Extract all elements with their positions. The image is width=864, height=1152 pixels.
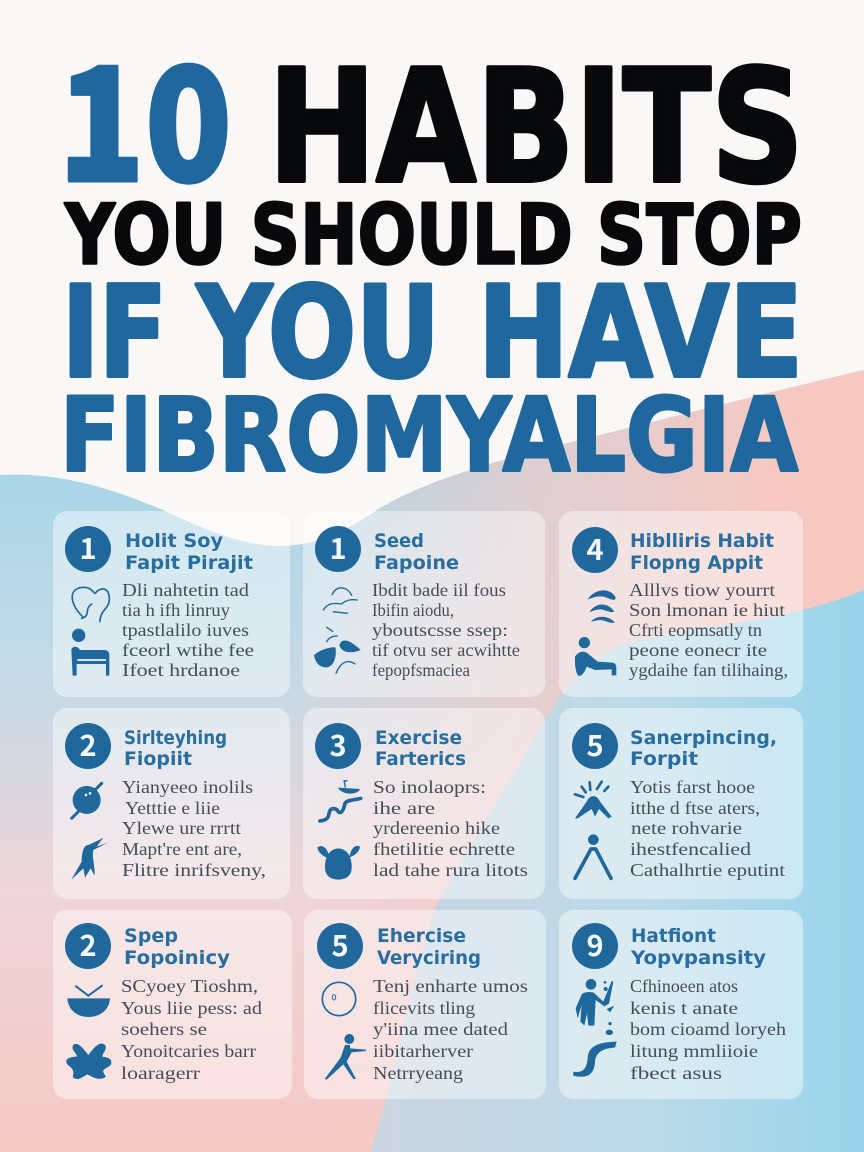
icon: ball and figure — [71, 783, 108, 880]
body text: yrdereenio hike — [373, 818, 500, 838]
body text: tif otvu ser acwihtte — [372, 640, 520, 660]
heading — [377, 925, 481, 969]
panel: card 5 — [303, 708, 545, 899]
icon: person drinking and water — [573, 979, 617, 1077]
number badge: 4 — [586, 527, 604, 569]
heading — [125, 530, 253, 574]
body text: fhetilitie echrette — [373, 839, 515, 859]
body text: lad tahe rura litots — [373, 860, 528, 880]
heading: Farterics — [375, 748, 466, 770]
body text: fceorl wtihe fee — [122, 640, 254, 660]
body text: SCyoey Tioshm, — [121, 976, 258, 996]
number badge — [315, 526, 361, 572]
number badge: 2 — [79, 923, 97, 965]
body text — [122, 777, 266, 880]
title line: if you have: YOU — [195, 259, 440, 406]
number badge: 2 — [79, 723, 97, 765]
number badge: 5 — [331, 923, 349, 965]
icon: burst and figure — [575, 782, 612, 878]
number badge: 1 — [79, 526, 97, 568]
body text: fepopfsmaciea — [372, 660, 470, 680]
number badge — [65, 526, 111, 572]
body text: loaragerr — [121, 1063, 200, 1083]
body text: bom cioamd loryeh — [630, 1019, 786, 1039]
body text: Cfhinoeen atos — [630, 976, 738, 996]
number badge: 9 — [586, 923, 604, 965]
heading: Exercise — [375, 727, 462, 749]
icon: bowl and splat — [66, 986, 111, 1079]
body text: Yianyeeo inolils — [122, 777, 253, 797]
body text: Netrryeang — [373, 1063, 463, 1083]
body text: Ibdit bade iil fous — [372, 580, 506, 600]
panel: card 1 — [53, 511, 290, 697]
number badge — [65, 923, 111, 969]
icon: heart and person in bed — [71, 587, 109, 676]
panel: card 7 — [53, 910, 292, 1099]
number badge — [572, 527, 618, 573]
heading: Fopoinicy — [124, 947, 231, 969]
number badge — [317, 923, 363, 969]
body text: soehers se — [121, 1019, 207, 1039]
panel: card 6 — [559, 708, 803, 899]
body text: Alllvs tiow yourrt — [629, 580, 775, 600]
panel: card 2 — [303, 511, 545, 697]
icon: ring and walking figure — [322, 982, 366, 1080]
panel: card 8 — [304, 910, 546, 1099]
number badge — [572, 923, 618, 969]
body text: nete rohvarie — [631, 818, 742, 838]
body text: Yetttie e liie — [125, 798, 220, 818]
body text: litung mmliioie — [630, 1041, 758, 1061]
heading — [630, 530, 774, 574]
body text: iibitarherver — [373, 1041, 473, 1061]
heading: Yopvpansity — [630, 947, 767, 969]
icon: waves and stretching person — [575, 590, 616, 676]
title line: if you have: IF — [62, 259, 167, 406]
panel: card 4 — [53, 708, 290, 899]
number badge: 3 — [329, 723, 347, 765]
number badge: 1 — [329, 526, 347, 568]
body text: Tenj enharte umos — [373, 976, 528, 996]
body text — [630, 976, 786, 1083]
body text: ihestfencalied — [630, 839, 751, 859]
number badge — [572, 723, 618, 769]
body text: ihe are — [373, 798, 435, 818]
body text: Cathalhrtie eputint — [630, 860, 785, 880]
heading — [375, 727, 466, 770]
body text: Cfrti eopmsatly tn — [629, 620, 762, 640]
body text: Yonoitcaries barr — [121, 1041, 256, 1061]
body text — [121, 976, 262, 1083]
title line: 10: 10 — [58, 0, 232, 227]
body text: Son lmonan ie hiut — [629, 600, 785, 620]
heading: Sanerpincing, — [630, 727, 777, 749]
body text — [122, 580, 254, 680]
body text: yboutscsse ssep: — [372, 620, 508, 640]
body text — [373, 777, 528, 880]
body text: Ifoet hrdanoe — [122, 660, 240, 680]
title — [58, 0, 804, 496]
heading — [124, 925, 231, 969]
body text: Yotis farst hooe — [630, 777, 755, 797]
number badge — [315, 723, 361, 769]
heading: Hiblliris Habit — [630, 530, 774, 552]
body text: tpastlalilo iuves — [122, 620, 249, 640]
body text: Ibifin aiodu, — [372, 600, 454, 620]
heading: Holit Soy — [125, 530, 224, 552]
heading: Sirlteyhing — [124, 727, 227, 749]
heading: Veryciring — [377, 947, 481, 969]
body text — [372, 580, 520, 680]
icon: clouds and leaves — [314, 588, 361, 673]
body text: Mapt're ent are, — [122, 839, 242, 859]
body text: Dli nahtetin tad — [122, 580, 249, 600]
heading: Flopng Appit — [630, 552, 763, 574]
body text: Yous liie pess: ad — [121, 998, 262, 1018]
heading: Spep — [124, 925, 178, 947]
body text: tia h ifh linruy — [122, 600, 230, 620]
body text: fbect asus — [630, 1063, 722, 1083]
body text: kenis t anate — [630, 998, 738, 1018]
heading — [630, 727, 777, 770]
body text: So inolaoprs: — [373, 777, 486, 797]
heading: Fiopiit — [124, 748, 192, 770]
heading: Fapoine — [374, 552, 459, 574]
panel: card 9 — [559, 910, 803, 1099]
body text: peone eonecr ite — [629, 640, 767, 660]
number badge — [65, 723, 111, 769]
title line: if you have: HAVE — [478, 259, 803, 406]
number badge: 5 — [586, 723, 604, 765]
body text: flicevits tling — [373, 998, 475, 1018]
body text: itthe d ftse aters, — [630, 798, 760, 818]
heading: Seed — [374, 530, 424, 552]
heading: Forpit — [630, 748, 698, 770]
heading — [630, 925, 767, 969]
body text: ygdaihe fan tilihaing, — [629, 660, 788, 680]
body text: Ylewe ure rrrtt — [122, 818, 241, 838]
body text: Flitre inrifsveny, — [122, 860, 266, 880]
heading — [374, 530, 459, 574]
body text — [630, 777, 785, 880]
heading: Ehercise — [377, 925, 466, 947]
icon: snake and shape — [317, 780, 361, 880]
panel: card 3 — [559, 511, 803, 697]
body text — [373, 976, 528, 1083]
title line: if you have — [62, 259, 803, 406]
heading — [124, 727, 227, 770]
heading: Hatfiont — [631, 925, 716, 947]
body text — [629, 580, 788, 680]
body text: y'iina mee dated — [373, 1019, 508, 1039]
heading: Fapit Pirajit — [125, 552, 253, 574]
